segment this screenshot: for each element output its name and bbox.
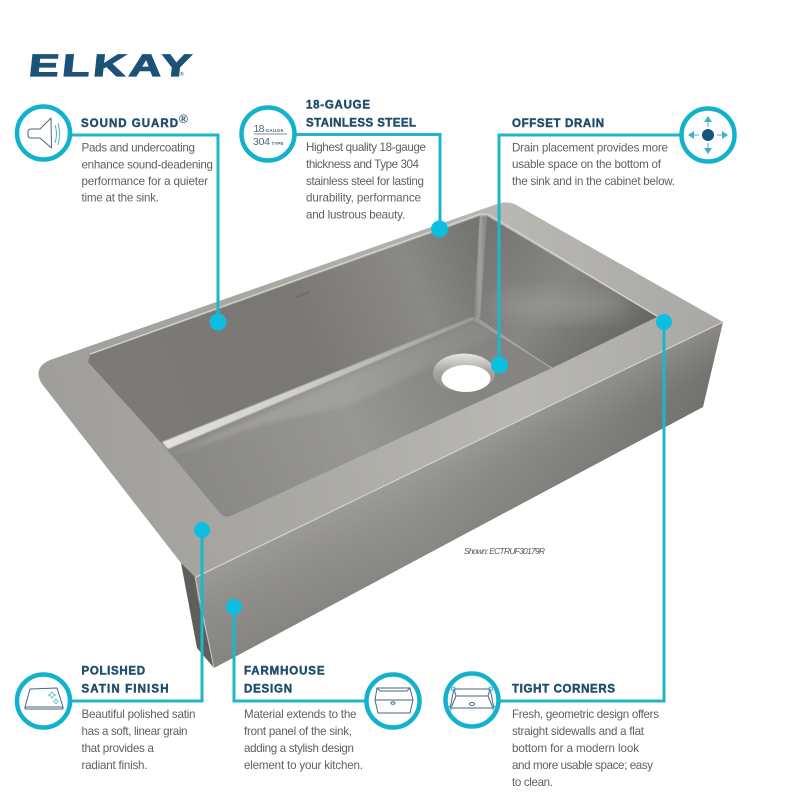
marker dot [656, 314, 672, 330]
heading: 18-GAUGE [306, 100, 370, 112]
heading [244, 666, 325, 696]
text block: front panel of the sink, [244, 725, 352, 738]
icon: 18 gauge 304 type: 304 [253, 136, 270, 148]
text block [244, 708, 363, 772]
heading: SOUND GUARD [81, 118, 178, 130]
icon: farmhouse sink [366, 674, 420, 728]
text block: Material extends to the [244, 708, 356, 721]
text block: bottom for a modern look [512, 742, 639, 755]
text block: that provides a [82, 742, 155, 755]
leader line [499, 135, 681, 365]
text block [306, 141, 426, 222]
panel: sound guard [17, 106, 226, 330]
heading: TIGHT CORNERS [512, 684, 615, 696]
heading: DESIGN [244, 684, 292, 696]
highlight strips [162, 317, 476, 449]
text block: durability, performance [306, 192, 421, 204]
text block: time at the sink. [82, 192, 159, 204]
heading: ® [179, 112, 188, 126]
sink flange [38, 202, 723, 578]
panel: tight corners [446, 314, 672, 789]
panel: farmhouse design [226, 599, 420, 772]
text block [82, 708, 196, 772]
text block: Drain placement provides more [512, 142, 668, 154]
model caption: Shown: ECTRUF30179R [464, 546, 545, 556]
leader line [234, 607, 366, 701]
icon: polished surface [17, 674, 70, 728]
drain [433, 354, 495, 392]
logo: Elkay: ® [180, 71, 184, 78]
marker dot [491, 356, 508, 374]
panel: 18-gauge stainless steel [242, 100, 448, 238]
marker dot [210, 314, 226, 330]
sink back wall [88, 216, 480, 445]
heading: POLISHED [82, 666, 145, 678]
marker dot [431, 220, 448, 238]
text block: Beautiful polished satin [82, 708, 196, 721]
text block: and more usable space; easy [512, 759, 653, 772]
heading: OFFSET DRAIN [512, 118, 604, 130]
leader line [498, 322, 664, 701]
sink logo mark [296, 292, 310, 297]
icon: 18 gauge 304 type: 18 [254, 123, 265, 135]
marker dot [194, 522, 210, 538]
text block: thickness and Type 304 [306, 158, 420, 171]
heading [306, 100, 416, 130]
sink floor [163, 318, 552, 517]
text block: enhance sound-deadening [82, 158, 213, 172]
text block: to clean. [512, 776, 553, 789]
text block: and lustrous beauty. [306, 208, 405, 222]
icon: drain arrows [682, 108, 734, 162]
panel: offset drain [491, 108, 734, 374]
text block: performance for a quieter [82, 175, 208, 188]
leader line [70, 135, 218, 321]
icon: sink corners [446, 674, 498, 726]
leader line [70, 530, 202, 701]
icon: 18 gauge 304 type: TYPE [272, 141, 284, 146]
sink right wall [477, 216, 657, 368]
text block: element to your kitchen. [244, 759, 363, 772]
text block: stainless steel for lasting [306, 175, 424, 188]
panel: polished satin finish [17, 522, 210, 772]
icon: speaker [17, 106, 70, 160]
leader line [295, 134, 440, 229]
sink side panel [181, 563, 214, 668]
text block: Pads and undercoating [82, 142, 195, 154]
logo: Elkay: ELKAY [27, 49, 193, 83]
marker dot [226, 599, 242, 615]
icon: 18 gauge 304 type [242, 108, 294, 160]
text block: Fresh, geometric design offers [512, 708, 659, 721]
text block: straight sidewalls and a flat [512, 725, 645, 738]
text block [82, 142, 213, 204]
heading [82, 666, 168, 696]
heading: FARMHOUSE [244, 666, 325, 678]
text block: adding a stylish design [244, 742, 354, 755]
text block [512, 142, 675, 188]
text block: has a soft, linear grain [82, 725, 188, 738]
heading: SATIN FINISH [82, 684, 168, 696]
heading [81, 112, 188, 130]
heading: STAINLESS STEEL [306, 118, 416, 130]
text block: the sink and in the cabinet below. [512, 175, 675, 188]
sink inner corner highlight [474, 216, 487, 318]
sink front panel [195, 322, 723, 668]
text block: Highest quality 18-gauge [306, 141, 426, 154]
text block: usable space on the bottom of [512, 158, 662, 171]
text block [512, 708, 659, 789]
text block: radiant finish. [82, 759, 148, 772]
icon: 18 gauge 304 type: GAUGE [266, 128, 284, 133]
product photo: stainless steel farmhouse sink [38, 202, 723, 668]
